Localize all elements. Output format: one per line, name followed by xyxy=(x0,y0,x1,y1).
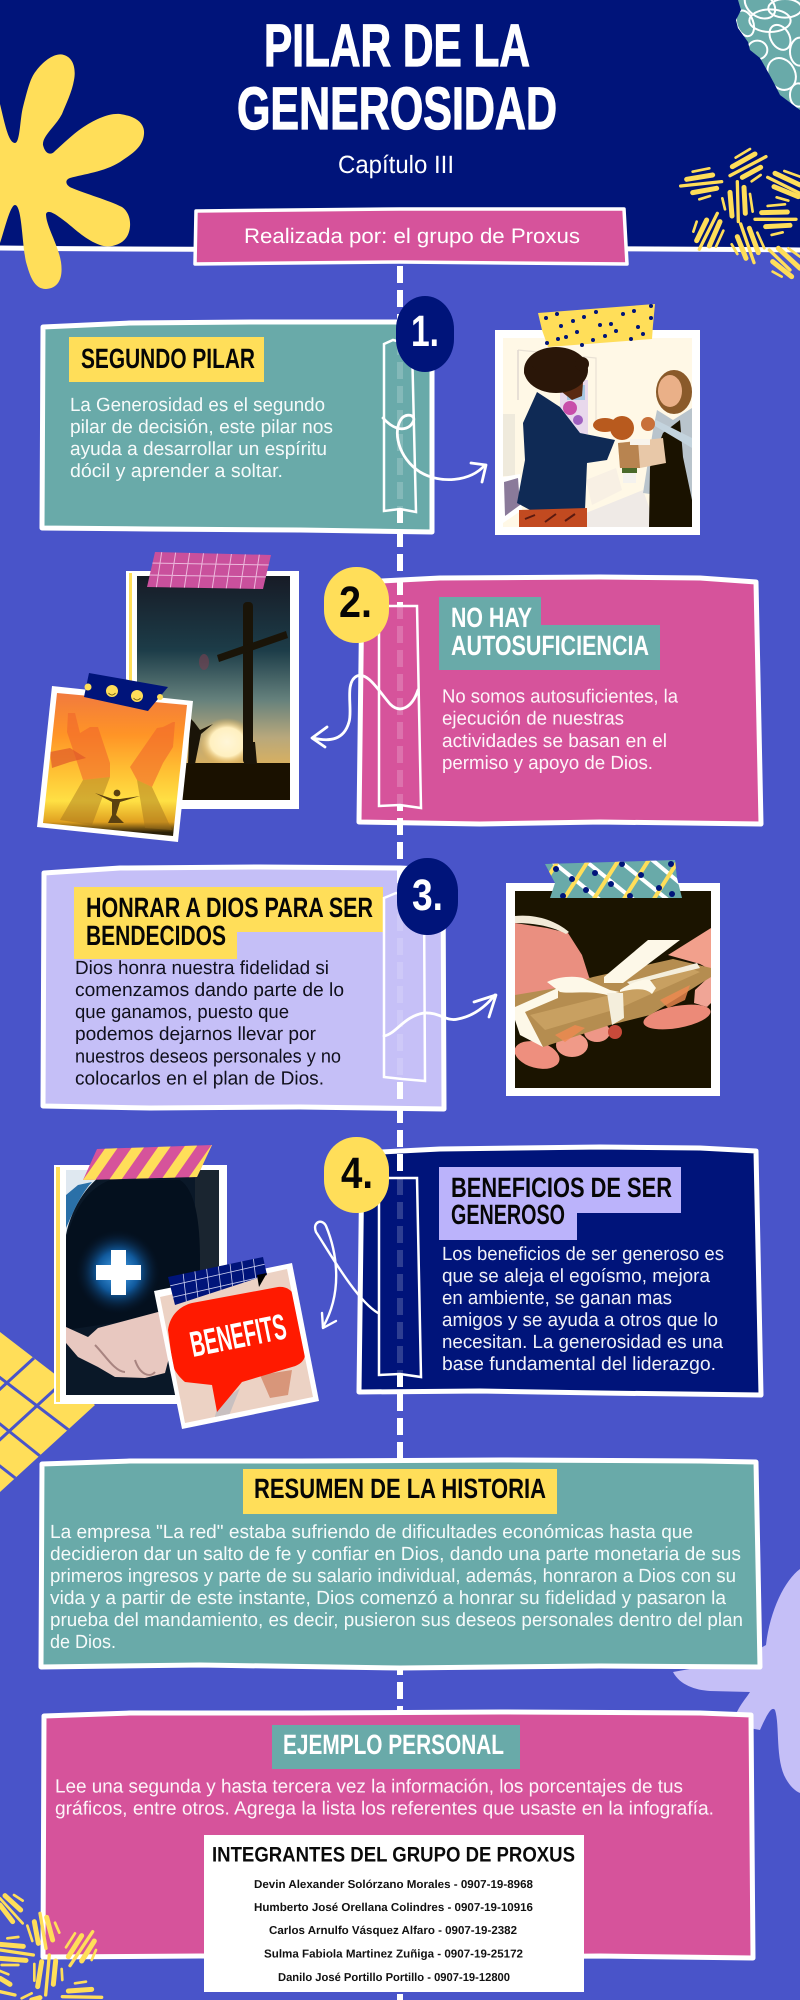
woman 1 blazer xyxy=(517,392,615,517)
heading 5 xyxy=(243,1469,557,1514)
photo 2: cross at sunset xyxy=(126,571,299,809)
arrow 3 xyxy=(384,995,496,1036)
text block 5: prueba del mandamiento, es decir, pusieron sus deseos personales dentro del plan xyxy=(50,1610,743,1631)
decoration: yellow scribbles bottom left xyxy=(0,1895,102,2000)
hair xyxy=(524,347,588,393)
decoration: yellow flower xyxy=(0,54,144,289)
members box: Danilo José Portillo Portillo - 0907-19-12800 xyxy=(278,1972,510,1984)
number badge 2: 2. xyxy=(339,578,372,627)
tape: yellow dotted xyxy=(538,304,655,347)
heading 4 xyxy=(439,1167,681,1240)
text block 1: ayuda a desarrollar un espíritu xyxy=(70,439,327,460)
arrow 4 xyxy=(315,1222,378,1328)
panel 6: ejemplo personal xyxy=(43,1712,753,1958)
text block 1: pilar de decisión, este pilar nos xyxy=(70,417,333,438)
banner xyxy=(195,209,627,264)
text block 2: permiso y apoyo de Dios. xyxy=(442,753,653,774)
text block 3 xyxy=(75,958,344,1090)
tape: navy grid xyxy=(168,1257,267,1305)
panel 3: honrar a Dios xyxy=(43,867,444,1109)
panel 4: beneficios de ser generoso xyxy=(359,1147,761,1395)
title: PILAR DE LA xyxy=(264,12,530,79)
panel 2: no hay autosuficiencia xyxy=(359,577,761,824)
arrow 1 xyxy=(383,415,486,482)
photo 4b: benefits speech bubble: BENEFITS xyxy=(187,1306,290,1365)
members box: Carlos Arnulfo Vásquez Alfaro - 0907-19-2382 xyxy=(269,1925,517,1937)
photo 4b: benefits speech bubble xyxy=(154,1262,319,1429)
text block 4: que se aleja el egoísmo, mejora xyxy=(442,1266,710,1287)
text block 4: en ambiente, se ganan mas xyxy=(442,1288,672,1309)
decoration: teal patterned shape xyxy=(736,0,800,110)
text block 4 xyxy=(442,1244,724,1375)
members box: INTEGRANTES DEL GRUPO DE PROXUS xyxy=(212,1844,575,1866)
title: GENEROSIDAD xyxy=(237,75,557,142)
text block 5: de Dios. xyxy=(50,1632,116,1653)
text block 6: Lee una segunda y hasta tercera vez la información, los porcentajes de tus xyxy=(55,1776,683,1798)
heading 1: SEGUNDO PILAR xyxy=(81,343,255,374)
number badge 4 xyxy=(324,1137,389,1213)
members box: Devin Alexander Solórzano Morales - 0907-19-8968 xyxy=(254,1879,534,1891)
number badge 3: 3. xyxy=(412,871,443,920)
banner: Realizada por: el grupo de Proxus xyxy=(244,225,580,248)
text block 5: decidieron dar un salto de fe y confiar en Dios, dando una parte monetaria de sus xyxy=(50,1544,741,1565)
text block 2: ejecución de nuestras xyxy=(442,708,624,730)
panel 5: resumen de la historia xyxy=(41,1460,760,1668)
text block 4: Los beneficios de ser generoso es xyxy=(442,1244,724,1265)
text block 5: La empresa "La red" estaba sufriendo de dificultades económicas hasta que xyxy=(50,1522,693,1543)
text block 2: actividades se basan en el xyxy=(442,731,667,752)
text block 5 xyxy=(50,1522,743,1653)
text block 5: vida y a partir de este instante, Dios comenzó a honrar su fidelidad y pasaron la xyxy=(50,1588,726,1609)
decoration: yellow scribbles top right xyxy=(681,149,800,277)
text block 1 xyxy=(70,395,333,482)
text block 3: podemos dejarnos llevar por xyxy=(75,1024,317,1045)
text block 2 xyxy=(442,686,678,774)
heading 3: BENDECIDOS xyxy=(86,920,226,951)
heading 4: BENEFICIOS DE SER xyxy=(451,1172,672,1203)
tape: navy smileys xyxy=(84,673,168,711)
text block 1: La Generosidad es el segundo xyxy=(70,395,325,416)
photo 1: two women exchanging a gift xyxy=(495,330,700,535)
members box: Humberto José Orellana Colindres - 0907-19-10916 xyxy=(254,1902,533,1914)
number badge 3 xyxy=(397,858,458,935)
plant xyxy=(623,472,636,483)
heading 6 xyxy=(272,1725,520,1769)
text block 3: colocarlos en el plan de Dios. xyxy=(75,1068,324,1090)
text block 4: necesitan. La generosidad es una xyxy=(442,1332,723,1353)
tape: teal argyle xyxy=(545,860,682,898)
text block 1: dócil y aprender a soltar. xyxy=(70,461,283,482)
number badge 2 xyxy=(324,567,389,643)
counter xyxy=(587,490,650,527)
text block 3: nuestros deseos personales y no xyxy=(75,1046,341,1068)
text block 3: comenzamos dando parte de lo xyxy=(75,980,344,1001)
heading 5: RESUMEN DE LA HISTORIA xyxy=(254,1473,546,1504)
heading 6: EJEMPLO PERSONAL xyxy=(283,1729,504,1760)
tape overlay panel 2 xyxy=(379,606,421,808)
members box xyxy=(204,1835,584,1992)
photo 4: hand and glowing cross xyxy=(54,1165,227,1404)
hands xyxy=(593,418,614,432)
text block 4: amigos y se ayuda a otros que lo xyxy=(442,1310,718,1331)
header divider line xyxy=(0,248,800,250)
text block 2: No somos autosuficientes, la xyxy=(442,686,678,708)
tape: pink grid xyxy=(147,552,271,589)
tape overlay panel 4 xyxy=(379,1178,421,1377)
text block 3: Dios honra nuestra fidelidad si xyxy=(75,958,329,979)
photo 2b: hands and sunset xyxy=(37,686,193,842)
panel 1: segundo pilar xyxy=(42,322,432,532)
text block 6 xyxy=(55,1776,714,1820)
heading 1 xyxy=(69,337,264,382)
members box: Sulma Fabiola Martinez Zuñiga - 0907-19-25172 xyxy=(264,1948,523,1960)
tape: pink and yellow stripes xyxy=(83,1145,212,1180)
text block 6: gráficos, entre otros. Agrega la lista los referentes que usaste en la infografía. xyxy=(55,1798,714,1820)
decoration: yellow lattice xyxy=(0,1332,95,1492)
photo 3: hands holding a gift xyxy=(506,883,720,1096)
decoration: lavender flower xyxy=(673,1569,800,1793)
text block 3: que ganamos, puesto que xyxy=(75,1002,289,1023)
tape overlay panel 1 xyxy=(384,340,416,512)
heading 3 xyxy=(74,887,383,959)
heading 3: HONRAR A DIOS PARA SER xyxy=(86,892,373,923)
number badge 1: 1. xyxy=(411,307,439,356)
number badge 4: 4. xyxy=(341,1149,373,1198)
text block 5: primeros ingresos y parte de su salario individual, además, honraron a Dios con su xyxy=(50,1566,736,1587)
woman 2 cardigan xyxy=(643,408,692,500)
tape overlay panel 3 xyxy=(384,893,425,1081)
background: navy header band xyxy=(0,0,800,249)
heading 2: NO HAY xyxy=(451,602,532,633)
box xyxy=(618,438,666,468)
heading 4: GENEROSO xyxy=(451,1199,565,1230)
left framed picture xyxy=(503,474,522,523)
center dashed timeline xyxy=(397,266,403,2000)
art behind woman xyxy=(560,380,588,434)
number badge 1 xyxy=(396,296,454,372)
text block 4: base fundamental del liderazgo. xyxy=(442,1354,716,1375)
arrow 2 xyxy=(312,675,418,747)
heading 2 xyxy=(439,597,660,670)
heading 2: AUTOSUFICIENCIA xyxy=(451,630,649,661)
title xyxy=(237,12,557,142)
subtitle: Capítulo III xyxy=(338,151,454,179)
